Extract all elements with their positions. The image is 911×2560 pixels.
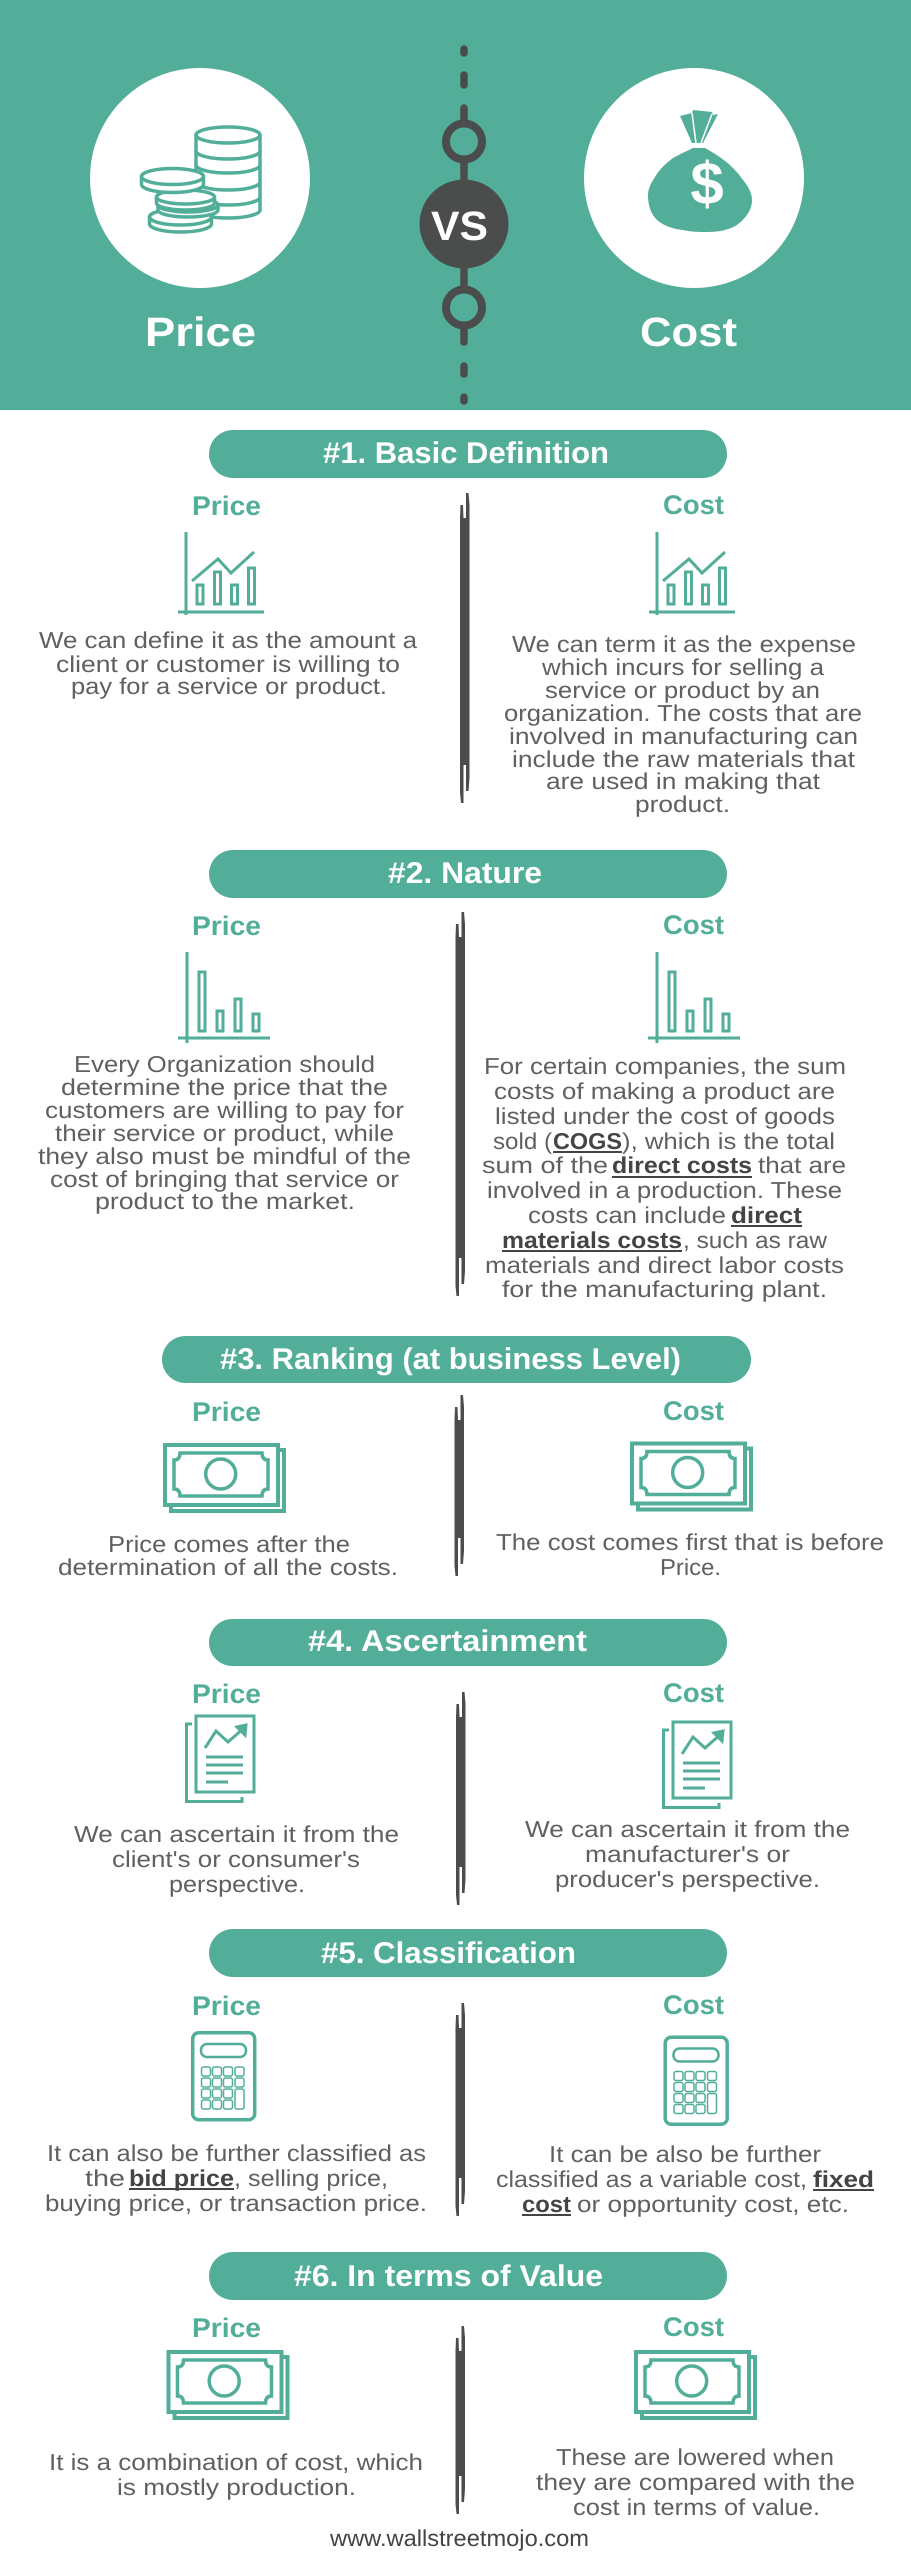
footer: website: www.wallstreetmojo.com xyxy=(329,2525,589,2551)
text: cost nature: COGS xyxy=(553,1128,622,1154)
section heading: #2. Nature xyxy=(388,857,542,890)
panel: 6 in terms of value xyxy=(49,2252,855,2520)
section heading xyxy=(162,1336,751,1383)
text: price value: is mostly production. xyxy=(117,2474,356,2500)
text: cost classification: or opportunity cost, etc. xyxy=(577,2191,849,2217)
icon: banknotes price xyxy=(168,2352,288,2418)
column label: cost: Cost xyxy=(663,2312,724,2342)
section heading xyxy=(209,1929,727,1977)
panel: 4 ascertainment xyxy=(74,1619,850,1905)
text: cost value: cost in terms of value. xyxy=(573,2494,820,2520)
divider xyxy=(454,1395,464,1576)
text: cost ascertainment: producer's perspective. xyxy=(555,1866,820,1892)
text: cost nature: ), which is the total xyxy=(622,1128,835,1154)
text: cost nature: involved in a production. These xyxy=(487,1177,842,1203)
section heading: #3. Ranking (at business Level) xyxy=(220,1343,681,1376)
section heading: #5. Classification xyxy=(321,1937,576,1970)
section heading xyxy=(209,850,727,898)
text: cost nature xyxy=(482,1053,846,1302)
icon: banknotes cost xyxy=(636,2352,755,2418)
text: cost ascertainment xyxy=(525,1816,850,1892)
text: price classification: It can also be further classified as xyxy=(47,2140,426,2166)
section heading xyxy=(209,2252,727,2300)
text: cost ranking xyxy=(496,1529,884,1580)
text: price definition: client or customer is willing to xyxy=(56,651,400,677)
panel: 3 ranking xyxy=(58,1336,884,1580)
text: cost definition xyxy=(504,631,862,817)
text: price classification: , selling price, xyxy=(234,2165,388,2191)
text: price definition: We can define it as the amount a xyxy=(39,627,417,653)
icon: bar chart cost xyxy=(648,952,740,1043)
text: price nature: Every Organization should xyxy=(74,1051,375,1077)
text: cost nature: For certain companies, the sum xyxy=(484,1053,846,1079)
text: cost definition: are used in making that xyxy=(546,768,821,794)
text: price nature xyxy=(38,1051,411,1214)
text: cost classification xyxy=(496,2141,874,2217)
icon: report document cost xyxy=(664,1722,731,1808)
heading: cost: Cost xyxy=(640,309,737,355)
text: price ascertainment: We can ascertain it from the xyxy=(74,1821,399,1847)
icon: report document price xyxy=(186,1716,254,1802)
vs connector with dashes and rings: VS xyxy=(431,203,488,249)
text: cost definition: organization. The costs that are xyxy=(504,700,862,726)
heading: price: Price xyxy=(145,309,256,355)
section heading: #4. Ascertainment xyxy=(308,1625,587,1658)
column label: price: Price xyxy=(192,2313,261,2343)
text: cost ascertainment: We can ascertain it from the xyxy=(525,1816,850,1842)
column label: price: Price xyxy=(192,1397,261,1427)
icon: banknotes price xyxy=(165,1445,284,1511)
text: price nature: customers are willing to pay for xyxy=(45,1097,404,1123)
icon: calculator price xyxy=(193,2033,255,2120)
column label: cost: Cost xyxy=(663,910,724,940)
text: cost nature: for the manufacturing plant. xyxy=(502,1276,827,1302)
section heading: #1. Basic Definition xyxy=(323,437,609,470)
column label: cost: Cost xyxy=(663,1396,724,1426)
text: cost ranking: The cost comes first that is before xyxy=(496,1529,884,1555)
text: cost definition: which incurs for selling a xyxy=(541,654,824,680)
text: cost nature: sold ( xyxy=(493,1128,552,1154)
text: cost classification: fixed xyxy=(813,2166,874,2192)
text: cost classification: It can be also be further xyxy=(549,2141,821,2167)
text: cost value: they are compared with the xyxy=(536,2469,855,2495)
text: price classification: bid price xyxy=(129,2165,234,2191)
icon: banknotes cost xyxy=(632,1444,751,1510)
text: cost definition: include the raw materials that xyxy=(512,746,856,772)
icon: bar chart price xyxy=(178,952,270,1043)
text: price nature: their service or product, while xyxy=(55,1120,394,1146)
column label: price: Price xyxy=(192,491,261,521)
divider xyxy=(456,912,465,1296)
text: cost classification: classified as a variable cost, xyxy=(496,2166,807,2192)
text: cost nature: , such as raw xyxy=(683,1227,827,1253)
text: price definition xyxy=(39,627,417,699)
text: price ascertainment xyxy=(74,1821,399,1897)
column label: price: Price xyxy=(192,1991,261,2021)
column label: cost: Cost xyxy=(663,1990,724,2020)
section heading xyxy=(209,430,727,478)
panel: 2 nature xyxy=(38,850,846,1302)
panel: header banner xyxy=(0,0,911,410)
text: price ranking: Price comes after the xyxy=(108,1531,350,1557)
divider xyxy=(460,493,470,803)
text: cost definition: We can term it as the expense xyxy=(512,631,856,657)
column label: cost: Cost xyxy=(663,490,724,520)
icon: line and bar chart cost xyxy=(649,532,735,615)
text: cost nature: direct costs xyxy=(612,1152,752,1178)
text: price value xyxy=(49,2449,423,2500)
text: cost ascertainment: manufacturer's or xyxy=(585,1841,790,1867)
vs connector with dashes and rings xyxy=(420,49,508,401)
divider xyxy=(456,2326,465,2514)
panel: 5 classification xyxy=(45,1929,874,2217)
icon: coins in white circle xyxy=(90,68,310,288)
text: price nature: product to the market. xyxy=(95,1188,355,1214)
text: cost nature: costs can include xyxy=(528,1202,726,1228)
text: price classification: the xyxy=(85,2165,125,2191)
text: price classification: buying price, or transaction price. xyxy=(45,2190,427,2216)
text: price ascertainment: client's or consumer's xyxy=(112,1846,360,1872)
icon: calculator cost xyxy=(665,2037,727,2124)
text: cost value: These are lowered when xyxy=(556,2444,834,2470)
text: cost classification: cost xyxy=(522,2191,571,2217)
divider xyxy=(456,2003,465,2216)
text: price ranking xyxy=(58,1531,398,1580)
section heading xyxy=(209,1619,727,1666)
text: cost definition: service or product by an xyxy=(545,677,820,703)
column label: price: Price xyxy=(192,1679,261,1709)
text: cost nature: materials costs xyxy=(502,1227,682,1253)
text: price definition: pay for a service or product. xyxy=(71,673,387,699)
text: price ranking: determination of all the costs. xyxy=(58,1554,398,1580)
text: cost ranking: Price. xyxy=(660,1554,721,1580)
text: cost nature: costs of making a product are xyxy=(494,1078,835,1104)
text: price ascertainment: perspective. xyxy=(169,1871,305,1897)
icon: line and bar chart price xyxy=(178,532,264,615)
panel: 1 basic definition xyxy=(39,430,862,817)
text: cost nature: materials and direct labor costs xyxy=(485,1252,844,1278)
text: price classification xyxy=(45,2140,427,2216)
icon: money bag in white circle: $ xyxy=(690,150,724,217)
text: price nature: cost of bringing that service or xyxy=(50,1166,399,1192)
text: cost nature: that are xyxy=(758,1152,846,1178)
text: price value: It is a combination of cost, which xyxy=(49,2449,423,2475)
text: cost definition: product. xyxy=(635,791,730,817)
divider xyxy=(456,1692,466,1905)
text: cost nature: sum of the xyxy=(482,1152,608,1178)
icon: money bag in white circle xyxy=(584,68,804,288)
text: cost nature: listed under the cost of goods xyxy=(495,1103,835,1129)
text: cost value xyxy=(536,2444,855,2520)
column label: cost: Cost xyxy=(663,1678,724,1708)
section heading: #6. In terms of Value xyxy=(294,2260,603,2293)
text: price nature: determine the price that the xyxy=(61,1074,388,1100)
column label: price: Price xyxy=(192,911,261,941)
text: price nature: they also must be mindful of the xyxy=(38,1143,411,1169)
text: cost definition: involved in manufacturing can xyxy=(509,723,858,749)
text: cost nature: direct xyxy=(731,1202,802,1228)
